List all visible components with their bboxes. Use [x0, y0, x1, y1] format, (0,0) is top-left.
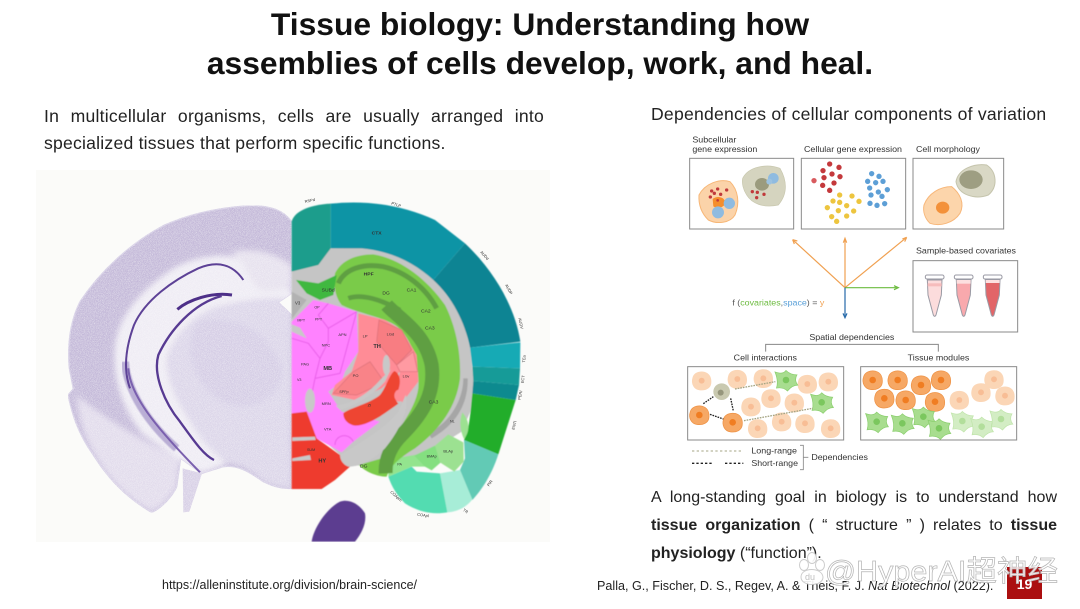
cortex: temporal association	[470, 342, 520, 368]
hypothalamus	[292, 412, 350, 489]
dentate gyrus band	[348, 297, 400, 310]
source link: Allen Institute: https://alleninstitute.org/division/brain-science/	[162, 578, 417, 592]
legend: dependencies: Long-range	[751, 446, 797, 456]
atlas region labels: COApl	[417, 512, 429, 518]
atlas region labels: V3	[295, 300, 301, 305]
atlas region labels: PTLP	[391, 201, 402, 208]
citation: Palla, G., Fischer, D. S., Regev, A. & Theis, F. J. Nat Biotechnol (2022).	[597, 578, 993, 592]
atlas region labels: TEa	[521, 354, 527, 363]
cortex: entorhinal	[464, 393, 516, 454]
atlas region labels: APN	[338, 332, 347, 337]
label: subcellular gene expression: Subcellular	[692, 134, 736, 144]
cortical amygdala	[388, 467, 447, 513]
bracket: spatial dependencies: Spatial dependencies	[809, 332, 895, 342]
panel: cell interactions	[688, 367, 844, 440]
atlas region labels: PERI	[517, 390, 523, 400]
page number badge	[1007, 567, 1042, 599]
bracket: spatial dependencies	[766, 332, 938, 352]
icon: gray cell	[742, 166, 785, 206]
atlas region labels: MRN	[322, 401, 331, 406]
atlas region labels	[295, 197, 527, 518]
label: subcellular gene expression: gene expression	[692, 144, 758, 154]
heading: dependencies figure: Dependencies of cellular components of variation	[651, 104, 1046, 124]
atlas region labels: LGd	[387, 332, 394, 337]
colored atlas hemisphere	[292, 197, 527, 542]
atlas region labels: ZI	[368, 403, 371, 408]
label: subcellular gene expression	[692, 134, 758, 154]
Nissl-stained brain hemisphere	[68, 206, 292, 512]
CA3 dark band	[386, 305, 432, 473]
V3 ventricle	[292, 292, 307, 319]
atlas region labels: MPT	[297, 319, 306, 323]
atlas region labels: NPC	[322, 343, 330, 348]
piriform area	[460, 440, 498, 500]
atlas region labels: CA3	[429, 399, 439, 405]
icon: light tube	[925, 275, 944, 316]
label: cell interactions: Cell interactions	[734, 352, 798, 362]
atlas region labels: LP	[363, 334, 368, 339]
goal text block	[651, 489, 1058, 562]
atlas region labels: AUDP	[504, 283, 514, 296]
panel: dependencies diagram	[687, 134, 1018, 470]
atlas region labels: ENTl	[510, 420, 518, 430]
atlas region labels: CA3	[425, 325, 435, 331]
atlas region labels: ECT	[520, 374, 526, 383]
watermark	[799, 552, 1058, 588]
goal text block: physiology (“function”).	[651, 545, 822, 562]
arrows: component axes	[793, 237, 907, 318]
atlas region labels: SUBd	[322, 288, 335, 294]
icon: paw: du	[805, 572, 815, 582]
subiculum	[296, 275, 337, 300]
cortex: auditory	[433, 243, 520, 348]
subthalamic nucleus	[394, 390, 404, 402]
formula: f(covariates,space) = y: f (covariates,space) = y	[732, 298, 825, 308]
atlas region labels: PO	[353, 373, 358, 378]
label: tissue modules: Tissue modules	[908, 352, 970, 362]
atlas region labels: VTA	[324, 427, 332, 432]
goal text block: tissue organization ( “ structure ” ) relates to tissue	[651, 517, 1057, 534]
label: sample-based covariates: Sample-based covariates	[916, 246, 1017, 256]
page number badge: 19	[1017, 576, 1032, 592]
panel: cell morphology	[913, 158, 1004, 229]
atlas region labels: AUDV	[517, 318, 525, 330]
atlas region labels: HPF	[364, 272, 374, 278]
legend: dependencies: Dependencies	[811, 452, 869, 462]
goal text block: A long-standing goal in biology is to understand how	[651, 489, 1057, 506]
purple tissue fragment	[312, 501, 365, 542]
atlas region labels: CA2	[421, 308, 431, 314]
title: Tissue biology: Understanding how	[271, 6, 809, 42]
midbrain	[292, 300, 380, 452]
label: cell morphology: Cell morphology	[916, 144, 981, 154]
gray islands	[292, 324, 391, 410]
atlas region labels: PAG	[301, 362, 309, 367]
atlas region labels: DG	[382, 291, 390, 297]
cortex: retrosplenial	[292, 204, 331, 272]
cortex: perirhinal	[472, 381, 519, 400]
atlas region labels: AUDd	[479, 250, 490, 261]
label: cellular gene expression: Cellular gene expression	[804, 144, 902, 154]
intro text block	[44, 106, 544, 153]
icon: medium tube	[954, 275, 973, 316]
atlas region labels: RSPd	[304, 197, 315, 204]
atlas region labels: SPFp	[339, 390, 348, 394]
atlas region labels: SUM	[307, 448, 315, 452]
atlas region labels: TH	[373, 344, 381, 350]
thalamus	[332, 313, 418, 402]
panel: tissue modules	[861, 367, 1017, 440]
atlas region labels: HY	[318, 459, 326, 465]
darker gray lateral tract	[428, 378, 468, 438]
atlas region labels: COApm	[389, 489, 404, 503]
panel: sample-based covariates	[913, 261, 1018, 332]
legend: dependencies	[692, 445, 869, 470]
intro text block: In multicellular organisms, cells are usually arranged into	[44, 106, 544, 126]
atlas region labels: CTX	[372, 230, 382, 236]
watermark text: @HyperAI超神经	[825, 555, 1058, 588]
cortex: posterior parietal	[331, 202, 465, 280]
hippocampal formation	[334, 254, 460, 477]
atlas region labels: MB	[323, 366, 332, 372]
legend: dependencies: Short-range	[751, 458, 798, 468]
atlas region labels: PA	[397, 463, 402, 467]
panel: subcellular gene expression	[690, 158, 794, 229]
atlas region labels: OP	[314, 305, 320, 309]
atlas region labels: NL	[450, 419, 455, 423]
panel: cellular gene expression	[801, 158, 906, 229]
cortex: ectorhinal	[472, 367, 520, 385]
atlas region labels: TR	[462, 507, 469, 515]
title: assemblies of cells develop, work, and heal.	[207, 45, 873, 81]
icon: dark tube	[983, 275, 1002, 316]
atlas region labels: V3	[297, 378, 301, 382]
atlas region labels: PIR	[486, 479, 494, 487]
CA dark band	[338, 266, 437, 308]
gray fibre tracts and ventricles	[292, 248, 474, 467]
transition area	[440, 470, 472, 512]
atlas region labels: DG	[360, 464, 368, 470]
icon: orange cell	[699, 181, 738, 223]
panel: brain atlas image	[68, 197, 527, 542]
atlas region labels: LGv	[403, 375, 410, 379]
title	[207, 6, 873, 81]
zona incerta	[343, 371, 400, 426]
atlas region labels: CA1	[407, 288, 417, 294]
atlas region labels: BLAp	[443, 448, 454, 453]
icon: paw	[800, 552, 824, 584]
intro text block: specialized tissues that perform specific functions.	[44, 133, 446, 153]
atlas region labels: BMAp	[427, 455, 437, 459]
basolateral amygdala group	[388, 453, 430, 477]
atlas region labels: PPT	[315, 317, 323, 321]
